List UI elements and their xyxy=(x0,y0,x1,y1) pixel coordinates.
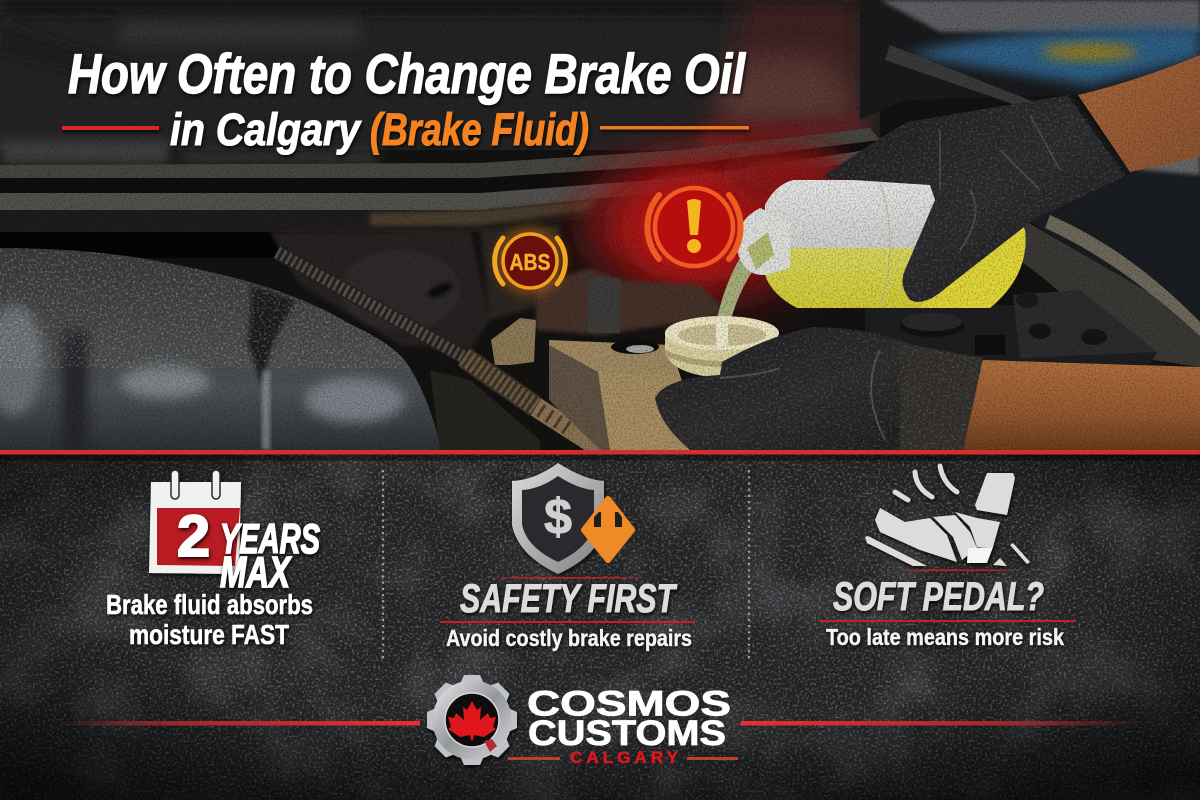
wordmark: CALGARY xyxy=(570,748,679,767)
years max label: 2 xyxy=(177,504,210,569)
warning icon: ABS xyxy=(495,227,565,295)
footer logo xyxy=(60,675,1141,767)
title: (Brake Fluid) xyxy=(370,104,589,155)
glove speckle xyxy=(650,90,1140,450)
hose xyxy=(277,252,603,450)
icon: shield with dollar: $ xyxy=(544,489,572,545)
brake hardware behind bottle xyxy=(865,290,1157,365)
red warning glow xyxy=(585,147,850,297)
fluid bottle xyxy=(736,180,1026,308)
years max label xyxy=(177,504,320,597)
warning icon: ABS: ABS xyxy=(510,249,550,275)
description xyxy=(106,589,313,650)
panel: safety first xyxy=(440,463,695,651)
column dividers xyxy=(383,470,749,660)
heading: SAFETY FIRST xyxy=(460,577,678,621)
fluid reservoir xyxy=(665,316,779,378)
title: in Calgary xyxy=(170,104,362,155)
right of bay xyxy=(860,0,1200,120)
upper glove xyxy=(823,95,1128,302)
grey engine block behind hose xyxy=(270,225,560,350)
photo grain xyxy=(0,0,1200,450)
master cylinder xyxy=(430,268,730,450)
panel: soft pedal xyxy=(819,466,1076,650)
description: Too late means more risk xyxy=(826,624,1064,650)
wordmark: CUSTOMS xyxy=(528,714,726,753)
panel: two years max xyxy=(106,470,320,650)
wordmark: COSMOS xyxy=(527,684,731,724)
icon: orange diamond xyxy=(584,499,632,560)
hood seal band xyxy=(0,128,880,258)
description: moisture FAST xyxy=(129,619,289,650)
years max label: YEARS xyxy=(220,515,320,562)
wordmark xyxy=(508,684,738,767)
engine bay photo xyxy=(0,0,1200,460)
lower glove xyxy=(655,327,983,450)
lower panel background xyxy=(0,450,1200,800)
years max label: MAX xyxy=(220,548,292,597)
title xyxy=(62,42,749,155)
title: How Often to Change Brake Oil xyxy=(68,42,746,105)
icon: gear xyxy=(427,675,517,765)
lower arm xyxy=(963,360,1200,450)
description: Brake fluid absorbs xyxy=(106,589,313,620)
icon: foot on pedal xyxy=(865,466,1030,566)
icon: shield with dollar xyxy=(512,463,604,574)
upper arm xyxy=(1078,55,1200,172)
brake fluid stream xyxy=(716,250,762,323)
icon: calendar xyxy=(149,470,241,574)
description: Avoid costly brake repairs xyxy=(446,625,692,651)
heading: SOFT PEDAL? xyxy=(833,575,1044,619)
air intake cover xyxy=(0,248,450,460)
warning icon: brake alert xyxy=(647,188,741,266)
